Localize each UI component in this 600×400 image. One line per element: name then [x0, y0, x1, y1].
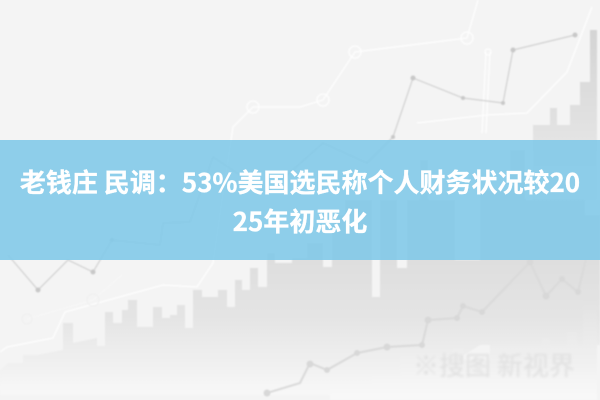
title band	[0, 140, 600, 260]
title	[20, 163, 580, 239]
title: 老钱庄 民调：53%美国选民称个人财务状况较20	[20, 163, 580, 200]
watermark: ※搜图 新视界	[413, 346, 575, 383]
lower rising line	[264, 242, 590, 396]
gray trend line	[8, 32, 578, 292]
title: 25年初恶化	[233, 202, 367, 239]
